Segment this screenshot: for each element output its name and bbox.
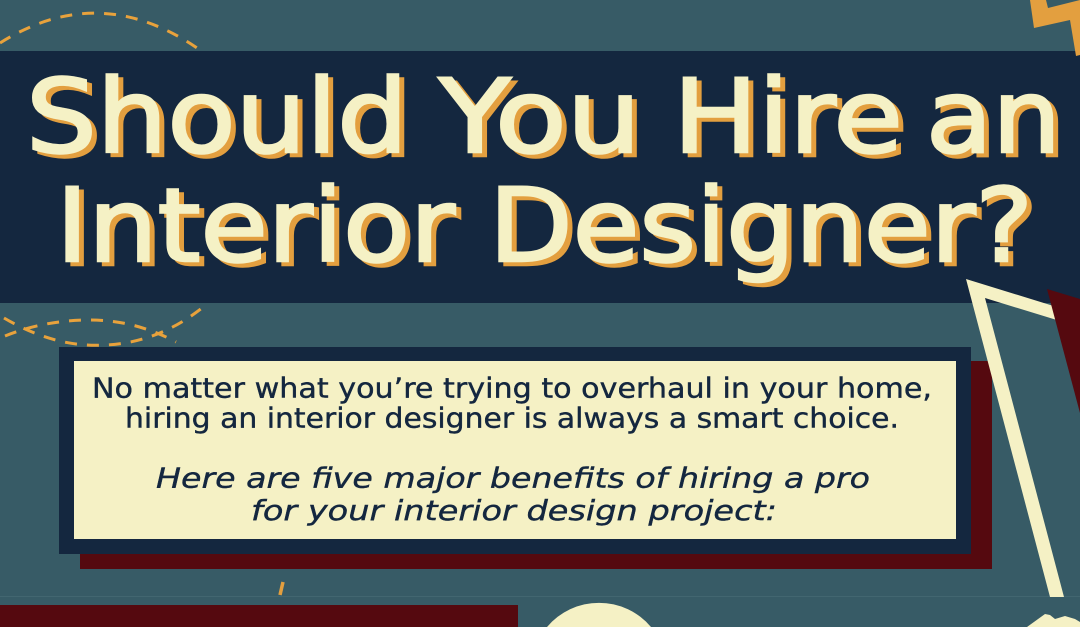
title text: Interior xyxy=(56,167,455,286)
decoration: dashed arcs lower left xyxy=(4,304,207,345)
panel shadow xyxy=(80,361,992,569)
title text: an xyxy=(926,58,1061,177)
title text xyxy=(26,58,1061,286)
title xyxy=(26,58,1066,290)
title text: You xyxy=(438,58,641,177)
intro text xyxy=(92,372,932,434)
decoration: orange zigzag top right xyxy=(1030,0,1080,56)
decoration: cream angled frame xyxy=(966,279,1064,597)
title shadow: Should xyxy=(31,62,413,181)
next section cream circle xyxy=(547,603,651,627)
italic lead-in text: Here are five major benefits of hiring a pro xyxy=(156,462,870,494)
title text: Hire xyxy=(673,58,903,177)
decoration: small orange dash xyxy=(280,582,283,595)
decoration: maroon triangle xyxy=(1047,289,1080,413)
panel fill xyxy=(74,361,956,539)
title shadow: Hire xyxy=(678,62,908,181)
intro text: No matter what you’re trying to overhaul in your home, xyxy=(92,372,932,404)
title shadow: Designer? xyxy=(494,171,1038,290)
title shadow xyxy=(31,62,1066,290)
title banner xyxy=(0,51,1080,303)
panel border xyxy=(59,347,971,554)
intro panel xyxy=(59,347,992,569)
title text: Should xyxy=(26,58,408,177)
title shadow: You xyxy=(443,62,646,181)
title text: Designer? xyxy=(489,167,1033,286)
title shadow: an xyxy=(931,62,1066,181)
title shadow: Interior xyxy=(61,171,460,290)
decoration: dashed arc top left xyxy=(0,13,200,50)
italic lead-in text xyxy=(156,462,870,527)
intro text: hiring an interior designer is always a smart choice. xyxy=(125,402,899,434)
next section cream shape xyxy=(1027,614,1080,627)
italic lead-in text: for your interior design project: xyxy=(251,495,777,527)
next section maroon block xyxy=(0,605,518,627)
